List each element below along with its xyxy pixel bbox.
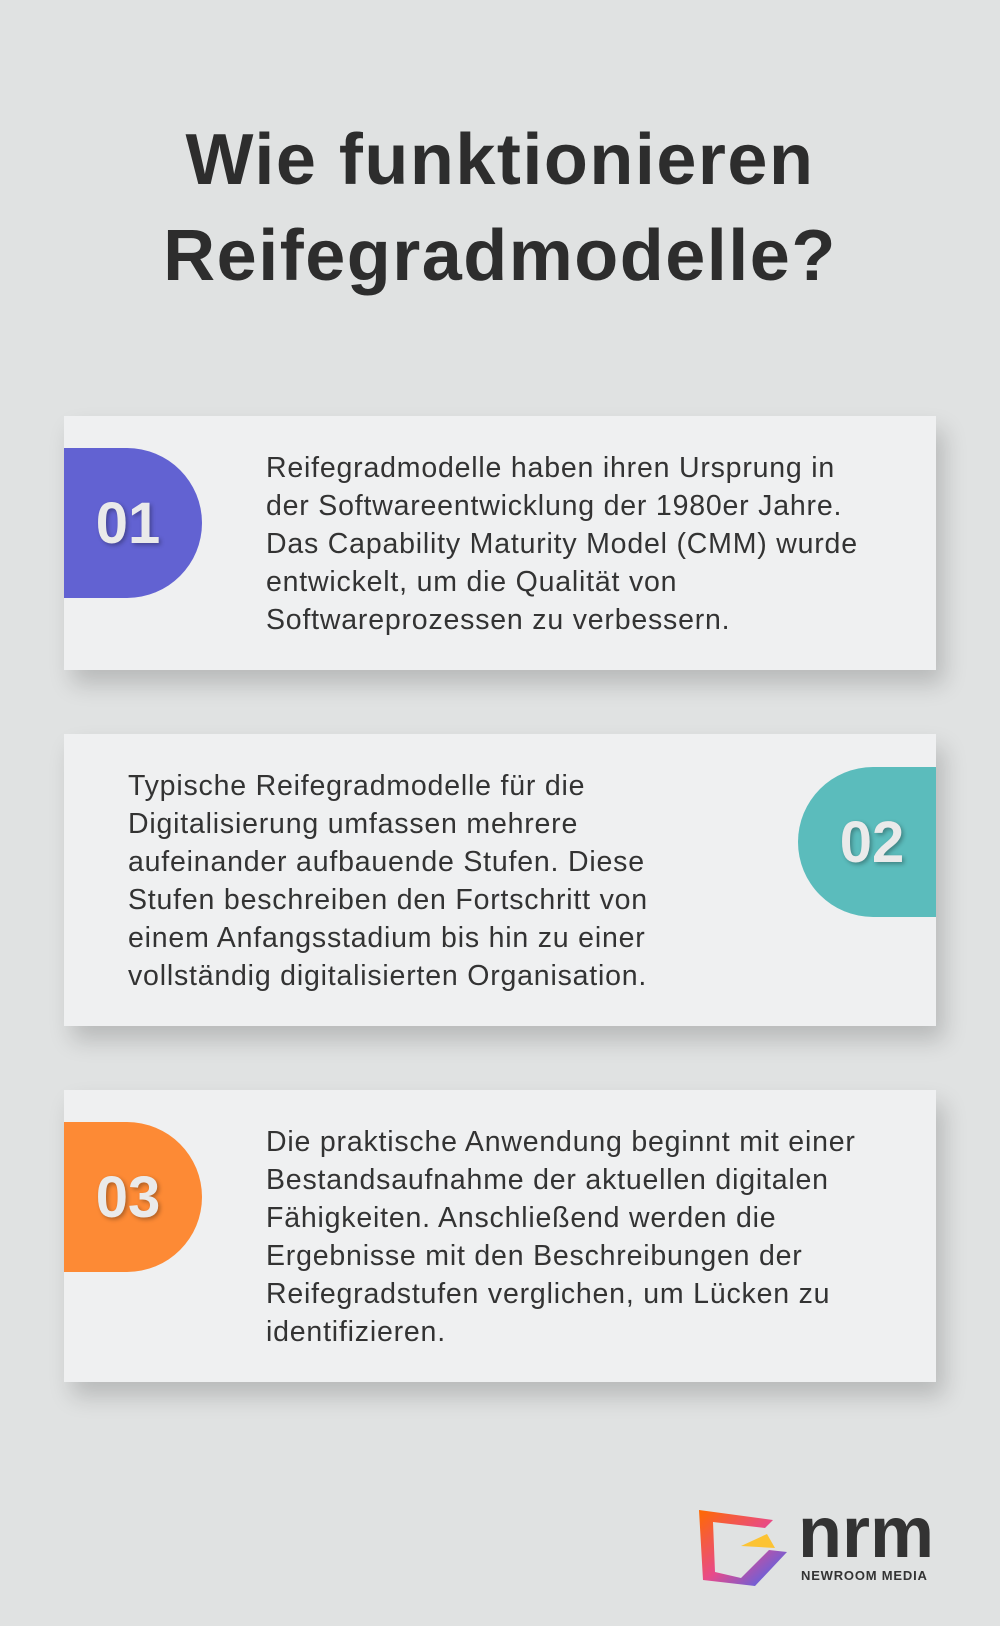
logo text: nrm xyxy=(798,1493,934,1573)
text 3: Bestandsaufnahme der aktuellen digitalen xyxy=(266,1164,829,1196)
text 3: Reifegradstufen verglichen, um Lücken zu xyxy=(266,1278,830,1310)
text 1: Das Capability Maturity Model (CMM) wurde xyxy=(266,528,858,560)
text 3: Die praktische Anwendung beginnt mit einer xyxy=(266,1126,856,1158)
text 1: entwickelt, um die Qualität von xyxy=(266,566,677,598)
badge 03: 03 xyxy=(96,1164,160,1230)
text 3: Ergebnisse mit den Beschreibungen der xyxy=(266,1240,803,1272)
title: Wie funktionieren xyxy=(186,120,814,200)
logo: NEWROOM MEDIA xyxy=(801,1568,928,1583)
badge 01: 01 xyxy=(96,490,160,556)
text 2: einem Anfangsstadium bis hin zu einer xyxy=(128,922,646,954)
badge 03 xyxy=(64,1122,202,1272)
title xyxy=(163,120,837,296)
text 2: Digitalisierung umfassen mehrere xyxy=(128,808,578,840)
panel: step 1 xyxy=(64,416,936,670)
text 2: vollständig digitalisierten Organisation. xyxy=(128,960,647,992)
text 2: Stufen beschreiben den Fortschritt von xyxy=(128,884,648,916)
text 3: Fähigkeiten. Anschließend werden die xyxy=(266,1202,776,1234)
badge 02: 02 xyxy=(840,810,904,874)
text 2 xyxy=(128,770,648,992)
text 1: Softwareprozessen zu verbessern. xyxy=(266,604,730,636)
panel: step 3 xyxy=(64,1090,936,1382)
badge 02 xyxy=(798,767,936,917)
text 1: Reifegradmodelle haben ihren Ursprung in xyxy=(266,452,835,484)
text 3 xyxy=(266,1126,856,1348)
text 2: Typische Reifegradmodelle für die xyxy=(128,770,585,802)
badge 01 xyxy=(64,448,202,598)
text 3: identifizieren. xyxy=(266,1316,446,1348)
text 1 xyxy=(266,452,858,636)
text 2: aufeinander aufbauende Stufen. Diese xyxy=(128,846,645,878)
title: Reifegradmodelle? xyxy=(163,216,837,296)
text 1: der Softwareentwicklung der 1980er Jahre. xyxy=(266,490,842,522)
logo xyxy=(699,1493,934,1586)
panel: step 2 xyxy=(64,734,936,1026)
icon: logo mark xyxy=(699,1510,787,1586)
